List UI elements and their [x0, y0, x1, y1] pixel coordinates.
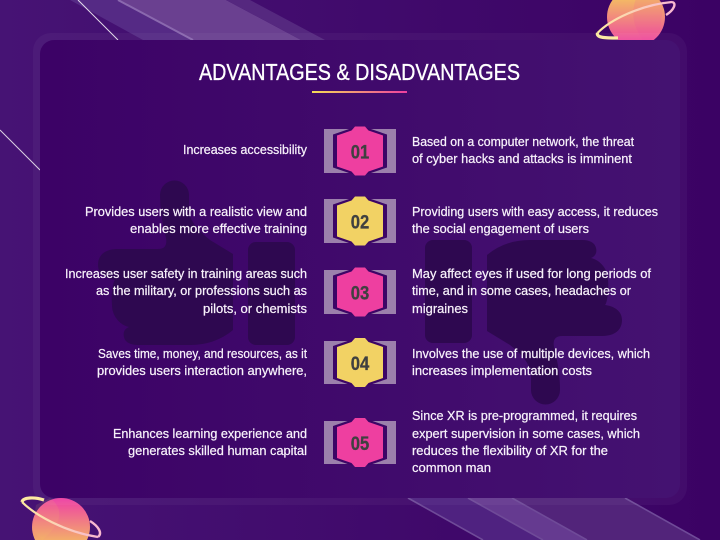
disadvantages text: the social engagement of users — [412, 222, 589, 236]
disadvantages text — [412, 135, 658, 475]
disadvantages text: expert supervision in some cases, which — [412, 427, 640, 441]
advantages text: Saves time, money, and resources, as it — [98, 347, 307, 361]
advantages text: Provides users with a realistic view and — [85, 205, 307, 219]
disadvantages text: Since XR is pre-programmed, it requires — [412, 409, 637, 423]
disadvantages text: migraines — [412, 302, 468, 316]
planet: bottom left — [22, 498, 100, 540]
disadvantages text: increases implementation costs — [412, 364, 592, 378]
item 05 — [324, 418, 396, 467]
advantages text: enables more effective training — [130, 222, 307, 236]
icon: thumbs down — [425, 240, 622, 404]
disadvantages text: Involves the use of multiple devices, which — [412, 347, 650, 361]
title underline — [312, 91, 407, 93]
item 03 — [324, 268, 396, 316]
item 04 — [324, 338, 396, 387]
item 03: 03 — [351, 282, 369, 304]
background light streaks: bottom — [408, 498, 700, 540]
panel — [33, 33, 687, 505]
advantages text: as the military, or professions such as — [96, 284, 307, 298]
background light streaks: top — [0, 0, 325, 170]
item 01: 01 — [351, 142, 369, 164]
advantages text: Enhances learning experience and — [113, 427, 307, 441]
item 01 — [324, 126, 396, 176]
advantages text: generates skilled human capital — [128, 444, 307, 458]
disadvantages text: common man — [412, 461, 491, 475]
disadvantages text: reduces the flexibility of XR for the — [412, 444, 608, 458]
item 02 — [324, 196, 396, 246]
advantages text: Increases accessibility — [183, 143, 308, 157]
advantages text: provides users interaction anywhere, — [97, 364, 307, 378]
item 04: 04 — [351, 353, 369, 375]
advantages text: pilots, or chemists — [203, 302, 307, 316]
advantages text: Increases user safety in training areas such — [65, 267, 307, 281]
disadvantages text: Based on a computer network, the threat — [412, 135, 635, 149]
disadvantages text: Providing users with easy access, it reduces — [412, 205, 658, 219]
planet: top right — [597, 0, 674, 46]
title: ADVANTAGES & DISADVANTAGES — [199, 59, 520, 85]
icon: thumbs up — [98, 180, 295, 345]
disadvantages text: time, and in some cases, headaches or — [412, 284, 631, 298]
item 05: 05 — [351, 433, 369, 455]
disadvantages text: May affect eyes if used for long periods of — [412, 267, 652, 281]
disadvantages text: of cyber hacks and attacks is imminent — [412, 152, 633, 166]
item 02: 02 — [351, 212, 369, 234]
advantages text — [65, 143, 308, 458]
